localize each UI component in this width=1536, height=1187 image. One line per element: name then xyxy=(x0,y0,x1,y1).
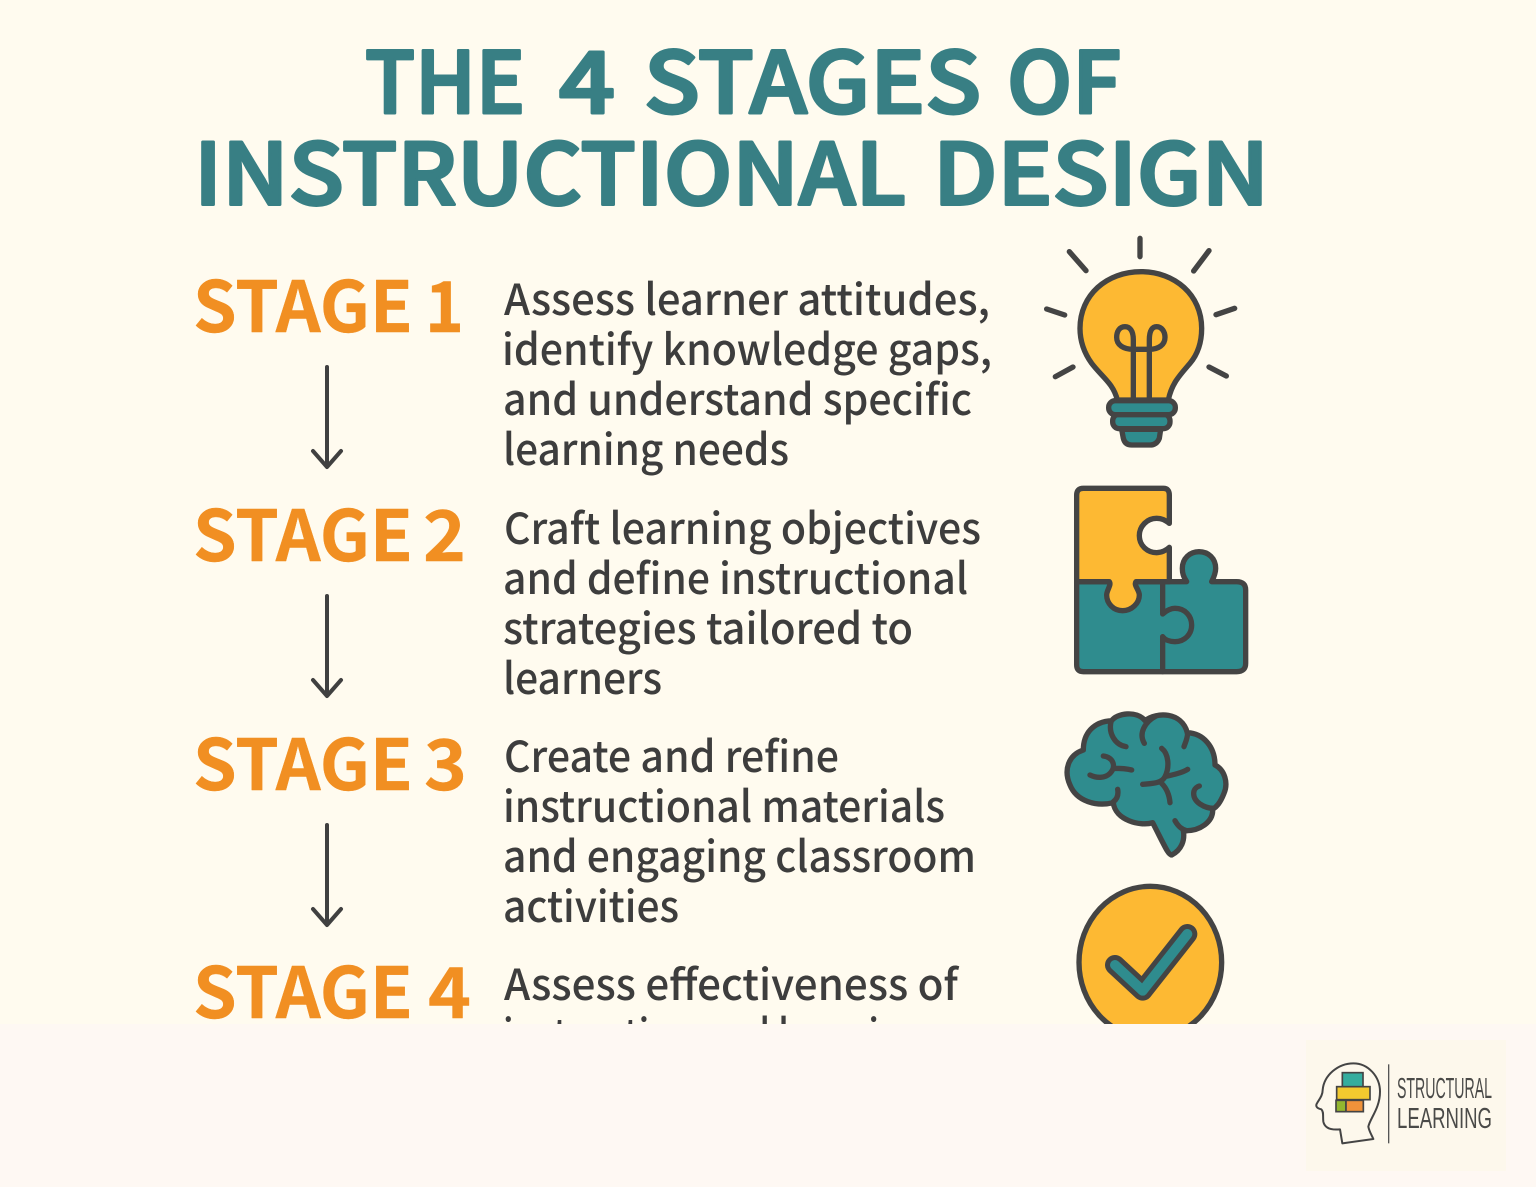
icon: check mark badge xyxy=(1079,886,1222,1038)
title: THE xyxy=(365,15,525,138)
text: stage 1 description: identify knowledge gaps, xyxy=(502,316,992,378)
heading: stage 2 xyxy=(196,508,462,562)
text: stage 1 description: Assess learner attitudes, xyxy=(504,266,990,328)
heading: stage 1: STAGE xyxy=(193,252,413,353)
text: stage 3 description: instructional materials xyxy=(503,773,945,835)
arrow: stage 1 to stage 2 xyxy=(313,367,341,467)
text: stage 4 description, cut off: instruction and learning xyxy=(503,1001,923,1063)
text: stage 2 description: learners xyxy=(503,645,662,707)
heading: stage 1 xyxy=(196,278,460,334)
text: stage 2 description: strategies tailored to xyxy=(503,595,913,657)
text: stage 1 description: and understand specific xyxy=(503,366,972,428)
text: stage 2 description: Craft learning objectives xyxy=(504,495,981,557)
text: stage 3 description: and engaging classroom xyxy=(503,823,976,885)
arrow: stage 2 to stage 3 xyxy=(313,596,341,696)
text: stage 4 description, cut off xyxy=(504,966,960,1024)
logo mark: head with blocks xyxy=(1316,1063,1389,1143)
heading: stage 4: STAGE xyxy=(193,938,413,1039)
title: OF xyxy=(1007,15,1121,138)
heading: stage 2: 2 xyxy=(423,481,466,582)
text: stage 2 description: and define instructional xyxy=(503,545,968,607)
text: stage 3 description: activities xyxy=(503,873,679,935)
title: STAGES xyxy=(644,15,981,138)
heading: stage 2: STAGE xyxy=(193,481,413,582)
heading: stage 3: STAGE xyxy=(193,710,413,811)
heading: stage 1: 1 xyxy=(425,252,464,353)
text: stage 3 description xyxy=(505,738,973,922)
title: INSTRUCTIONAL xyxy=(194,106,906,230)
title xyxy=(201,48,1262,207)
logo wordmark xyxy=(1397,1073,1492,1135)
icon: puzzle pieces xyxy=(1077,488,1246,672)
title: DESIGN xyxy=(933,106,1269,230)
logo: Structural Learning xyxy=(1306,1040,1506,1171)
text: stage 1 description: learning needs xyxy=(503,416,789,478)
heading: stage 3: 3 xyxy=(424,710,467,811)
text: stage 2 description xyxy=(504,510,980,694)
footer band xyxy=(0,1024,1536,1187)
text: stage 4 description, cut off: Assess effectiveness of xyxy=(504,951,960,1013)
icon: brain xyxy=(1067,714,1226,855)
arrow: stage 3 to stage 4 xyxy=(313,825,341,925)
text: stage 3 description: Create and refine xyxy=(504,723,839,785)
heading: stage 3 xyxy=(196,736,464,792)
title: 4 xyxy=(559,15,615,138)
heading: stage 4: 4 xyxy=(428,938,471,1039)
heading: stage 4 xyxy=(196,964,470,1020)
text: stage 1 description xyxy=(502,266,992,478)
icon: light bulb xyxy=(1047,238,1235,445)
main content clipped at the fold xyxy=(193,15,1269,1063)
